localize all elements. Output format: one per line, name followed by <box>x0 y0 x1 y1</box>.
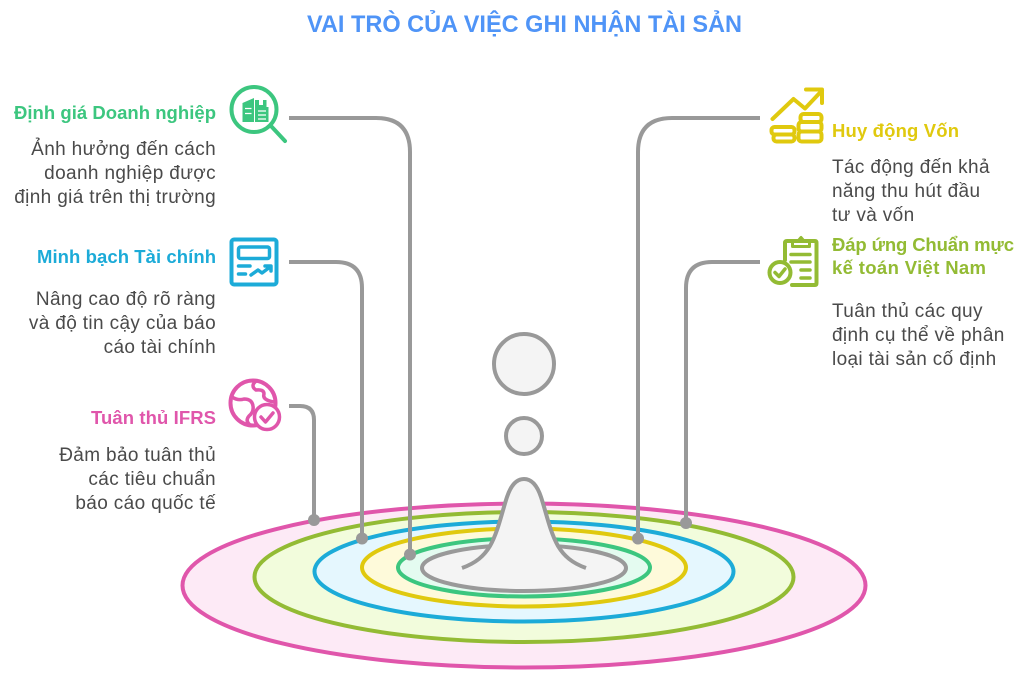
connector: IFRS <box>289 406 320 526</box>
ring: Tuân thủ IFRS <box>182 504 866 668</box>
block: Tuân thủ IFRS <box>59 407 216 514</box>
block: Minh bạch Tài chính: Minh bạch Tài chính <box>37 246 216 267</box>
block: Đáp ứng Chuẩn mực: loại tài sản cố định <box>832 349 997 370</box>
water splash peak <box>462 479 586 568</box>
block: Minh bạch Tài chính: và độ tin cậy của báo <box>29 313 216 334</box>
block: Huy động Vốn: năng thu hút đầu <box>832 181 980 202</box>
block: Đáp ứng Chuẩn mực <box>832 234 1014 370</box>
block: Tuân thủ IFRS: Đảm bảo tuân thủ <box>59 445 216 466</box>
ring: Huy động Vốn <box>362 528 686 606</box>
icon: globe with check <box>230 380 280 430</box>
block: Định giá Doanh nghiệp: Định giá Doanh nghiệp <box>14 102 216 123</box>
block: Tuân thủ IFRS: các tiêu chuẩn <box>88 469 216 490</box>
connector: Định giá <box>289 118 416 560</box>
block: Định giá Doanh nghiệp: định giá trên thị trường <box>14 187 216 208</box>
droplet small <box>506 418 542 454</box>
droplet large <box>494 334 554 394</box>
block: Định giá Doanh nghiệp: doanh nghiệp được <box>44 163 216 184</box>
block: Huy động Vốn: Tác động đến khả <box>832 157 990 178</box>
block: Định giá Doanh nghiệp: Ảnh hưởng đến cách <box>31 138 216 160</box>
block: Tuân thủ IFRS: báo cáo quốc tế <box>75 493 216 514</box>
ring: Minh bạch Tài chính <box>314 522 734 622</box>
block: Đáp ứng Chuẩn mực: Đáp ứng Chuẩn mực <box>832 234 1014 255</box>
connector: Minh bạch <box>289 262 368 544</box>
icon: magnifier with building <box>232 87 285 141</box>
block: Minh bạch Tài chính <box>29 246 216 358</box>
ring: Đáp ứng Chuẩn mực <box>254 512 794 642</box>
connector: Chuẩn mực <box>680 262 760 529</box>
icon: clipboard with check <box>770 238 816 285</box>
block: Minh bạch Tài chính: Nâng cao độ rõ ràng <box>36 289 216 310</box>
block: Tuân thủ IFRS: Tuân thủ IFRS <box>91 407 216 428</box>
title: VAI TRÒ CỦA VIỆC GHI NHẬN TÀI SẢN <box>307 9 742 38</box>
connector: Huy động Vốn <box>632 118 760 544</box>
block: Minh bạch Tài chính: cáo tài chính <box>104 337 216 358</box>
icon: financial report <box>232 240 276 284</box>
block: Định giá Doanh nghiệp <box>14 102 216 208</box>
block: Huy động Vốn <box>832 120 990 226</box>
block: Huy động Vốn: tư và vốn <box>832 205 914 226</box>
block: Đáp ứng Chuẩn mực: Tuân thủ các quy <box>832 301 983 322</box>
ring: centre <box>422 545 626 591</box>
concentric ripple diagram <box>182 334 866 668</box>
icon: coins and growth arrow <box>772 90 822 142</box>
ring: Định giá Doanh nghiệp <box>398 538 650 596</box>
block: Huy động Vốn: Huy động Vốn <box>832 120 959 141</box>
block: Đáp ứng Chuẩn mực: định cụ thể về phân <box>832 325 1005 346</box>
block: Đáp ứng Chuẩn mực: kế toán Việt Nam <box>832 257 986 278</box>
